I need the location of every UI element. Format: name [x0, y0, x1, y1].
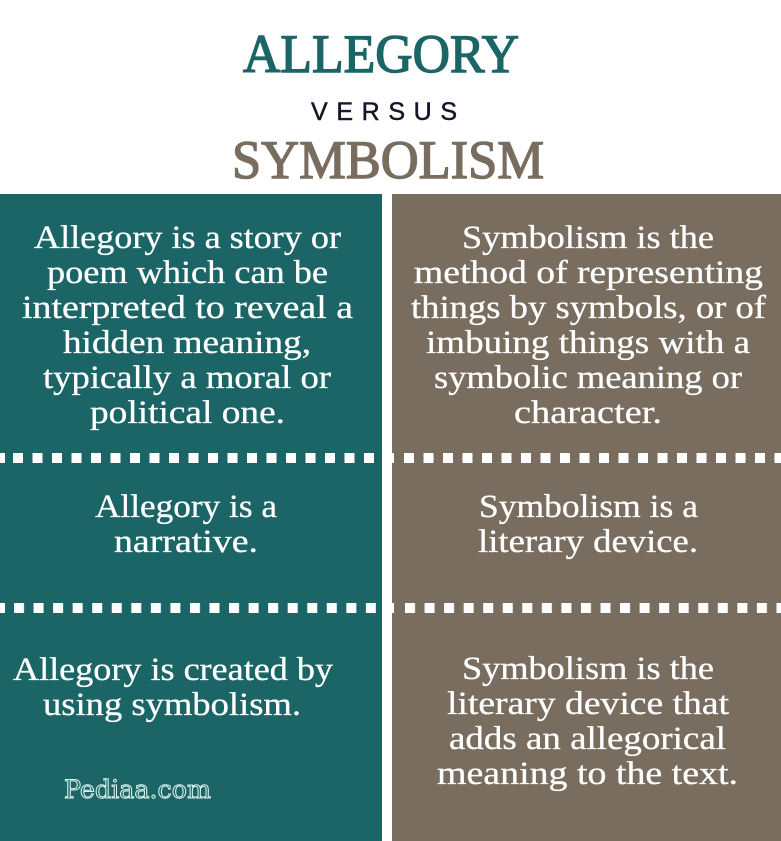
title: versus: VERSUS: [311, 98, 457, 126]
title: Symbolism: SYMBOLISM: [232, 130, 544, 190]
text: symbolism definition: symbolic meaning or: [434, 360, 742, 396]
divider: upper dotted row, left: [0, 453, 374, 463]
text: allegory is a narrative: narrative.: [114, 524, 258, 560]
text: allegory definition: Allegory is a story or: [34, 220, 341, 256]
text: symbolism adds allegorical meaning: literary device that: [447, 686, 729, 722]
text: allegory created by symbolism: Allegory is created by: [13, 652, 334, 688]
text: allegory definition: interpreted to reveal a: [22, 290, 353, 326]
text: allegory definition: hidden meaning,: [63, 325, 311, 361]
text: symbolism definition: character.: [514, 395, 662, 431]
text: allegory is a narrative: Allegory is a: [95, 489, 277, 525]
text: symbolism is a literary device: [478, 489, 698, 560]
divider: lower dotted row, left: [0, 603, 376, 613]
text: allegory created by symbolism: [13, 652, 334, 723]
text: symbolism definition: Symbolism is the: [462, 220, 714, 256]
panel: allegory column: [0, 194, 382, 841]
text: symbolism definition: method of representing: [414, 255, 763, 291]
panel: symbolism column: [392, 194, 781, 841]
text: allegory definition: poem which can be: [47, 255, 328, 291]
text: allegory definition: [22, 220, 353, 431]
divider: upper dotted row, right: [392, 453, 781, 463]
title: Allegory: ALLEGORY: [243, 24, 519, 84]
text: symbolism definition: [411, 220, 766, 431]
text: allegory definition: typically a moral or: [43, 360, 331, 396]
logo: Pediaa.com: Pediaa.com: [64, 775, 211, 804]
text: symbolism adds allegorical meaning: Symbolism is the: [462, 651, 714, 687]
divider: lower dotted row, right: [392, 603, 781, 613]
text: allegory created by symbolism: using symbolism.: [43, 687, 301, 723]
text: symbolism is a literary device: literary device.: [478, 524, 698, 560]
text: symbolism definition: things by symbols, or of: [411, 290, 766, 326]
text: symbolism adds allegorical meaning: adds an allegorical: [449, 721, 726, 757]
text: allegory definition: political one.: [90, 395, 285, 431]
text: allegory is a narrative: [95, 489, 277, 560]
text: symbolism adds allegorical meaning: meaning to the text.: [437, 756, 738, 792]
text: symbolism is a literary device: Symbolism is a: [479, 489, 698, 525]
text: symbolism adds allegorical meaning: [437, 651, 738, 792]
text: symbolism definition: imbuing things with a: [426, 325, 750, 361]
